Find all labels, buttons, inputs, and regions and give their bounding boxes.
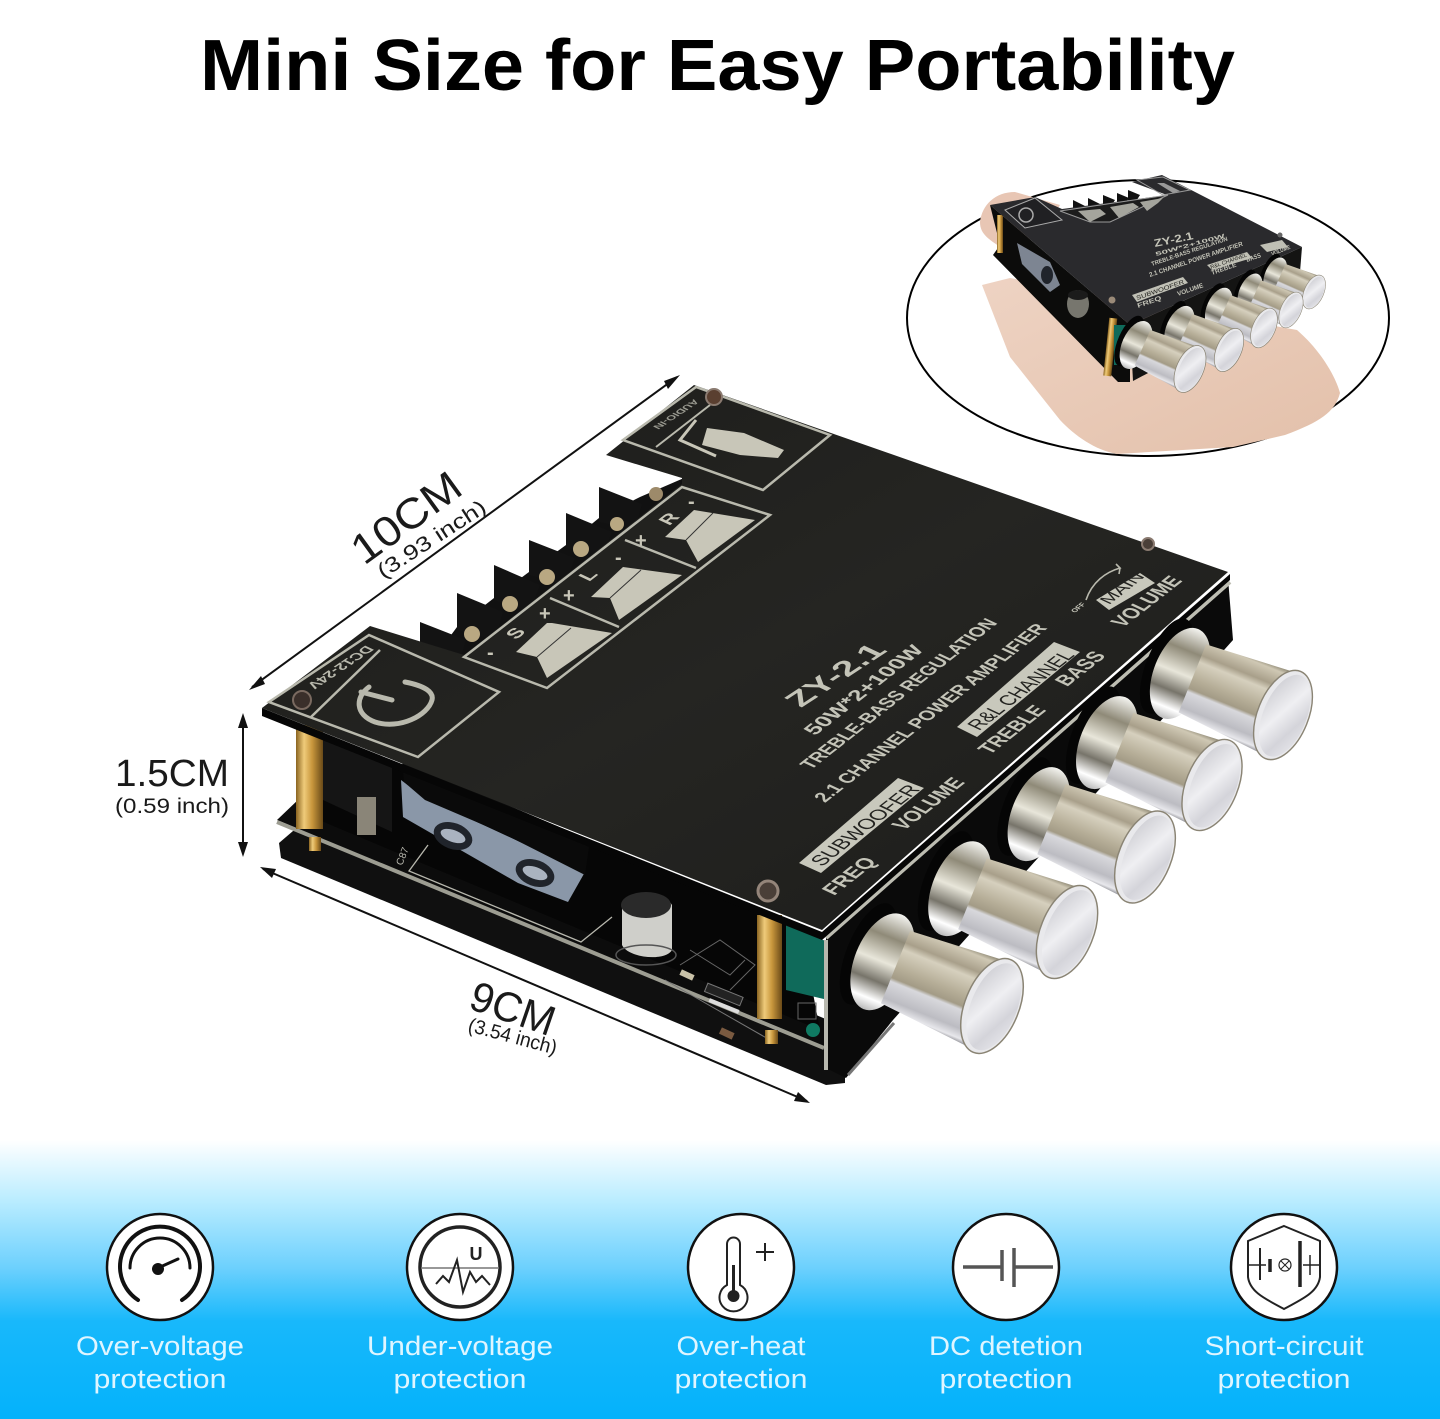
- product labels: ZY-2.1: [777, 639, 894, 711]
- icon: gauge: [120, 1227, 200, 1300]
- mini board body: [990, 175, 1302, 382]
- power box: [269, 635, 499, 757]
- main volume label group: OFF: [1069, 601, 1088, 614]
- subwoofer label group: VOLUME: [887, 774, 970, 833]
- terminal labels: S: [501, 625, 531, 642]
- mini board labels: 50W*2+100W: [1155, 233, 1227, 258]
- gold standoffs: [296, 725, 782, 1044]
- dimension: 9CM: 9CM: [464, 972, 562, 1045]
- bottom plate: [279, 825, 845, 1085]
- screw terminals: [420, 478, 690, 660]
- icon: voltage wave: [420, 1227, 500, 1307]
- green PCB edge: [786, 925, 828, 1000]
- feature: over-heat protection: [674, 1214, 808, 1394]
- mini board labels: SUBWOOFER: [1136, 279, 1186, 302]
- dimension: 1.5CM: [115, 713, 248, 857]
- small capacitor: [616, 892, 676, 965]
- mini board labels: [1132, 230, 1291, 310]
- main volume label group: MAIN: [1095, 570, 1149, 607]
- knobs: [828, 611, 1326, 1064]
- mini board labels: TREBLE-BASS REGULATION: [1151, 237, 1229, 268]
- feature: over-voltage protection: Over-voltage: [76, 1331, 244, 1361]
- inset ellipse frame: [907, 180, 1389, 456]
- mini board labels: 2.1 CHANNEL POWER AMPLIFIER: [1148, 241, 1244, 279]
- mini board labels: TREBLE: [1211, 261, 1238, 277]
- feature: under-voltage protection: Under-voltage: [367, 1331, 553, 1361]
- main volume label group: [1069, 564, 1187, 630]
- terminal labels: +: [563, 585, 575, 607]
- title: Mini Size for Easy Portability: [200, 26, 1235, 106]
- R&L channel label group: [957, 642, 1111, 757]
- icon: speakers: [516, 510, 755, 678]
- main volume label group: VOLUME: [1106, 573, 1187, 630]
- R&L channel label group: TREBLE: [973, 702, 1051, 757]
- product labels: TREBLE-BASS REGULATION: [796, 616, 1003, 772]
- power box: DC12-24V: [302, 643, 377, 690]
- hand: [982, 278, 1340, 454]
- top plate thickness: [262, 574, 1230, 940]
- R&L channel label group: BASS: [1050, 648, 1111, 689]
- terminal labels: +: [635, 530, 647, 552]
- product labels: 50W*2+100W: [798, 641, 930, 738]
- dimension: 10CM: (3.93 inch): [373, 496, 491, 583]
- subwoofer label group: SUBWOOFER: [805, 782, 925, 869]
- feature: over-heat protection: protection: [674, 1364, 808, 1394]
- terminal labels: +: [539, 603, 551, 625]
- mini board labels: R&L CHANNEL: [1210, 253, 1248, 271]
- product labels: 2.1 CHANNEL POWER AMPLIFIER: [810, 621, 1052, 805]
- mini board labels: VOLUME: [1177, 282, 1205, 298]
- mini board labels: BASS: [1246, 252, 1262, 264]
- terminal labels: -: [487, 642, 494, 664]
- icon: capacitor symbol: [963, 1248, 1053, 1287]
- feature: short-circuit protection: Short-circuit: [1204, 1331, 1364, 1361]
- blue feature band: [0, 1140, 1440, 1419]
- inner dark cavity: [300, 725, 820, 1030]
- R&L channel label group: R&L CHANNEL: [962, 647, 1080, 733]
- feature: DC detection protection: [929, 1214, 1083, 1394]
- terminal labels: -: [615, 547, 622, 569]
- feature: DC detection protection: DC detetion: [929, 1331, 1083, 1361]
- feature: over-voltage protection: protection: [94, 1364, 226, 1394]
- middle plate: [277, 798, 828, 1048]
- mini board labels: ZY-2.1: [1153, 230, 1195, 250]
- dimension: 1.5CM: (0.59 inch): [115, 795, 229, 818]
- PCB silkscreen trace: C87: [395, 846, 412, 867]
- feature: short-circuit protection: protection: [1218, 1364, 1350, 1394]
- front panel: [826, 578, 1233, 1078]
- feature: over-heat protection: Over-heat: [676, 1331, 806, 1361]
- mini board labels: FREQ: [1137, 295, 1162, 310]
- icon: voltage wave: U: [470, 1244, 482, 1264]
- feature: DC detection protection: protection: [940, 1364, 1072, 1394]
- feature: under-voltage protection: protection: [394, 1364, 526, 1394]
- product labels: [777, 616, 1052, 805]
- large capacitors: [401, 760, 590, 902]
- terminal labels: L: [574, 567, 603, 584]
- subwoofer label group: [799, 774, 970, 898]
- subwoofer label group: FREQ: [817, 854, 882, 898]
- terminal labels: -: [688, 491, 695, 513]
- icon: thermometer: [720, 1238, 774, 1311]
- feature: short-circuit protection: [1204, 1214, 1364, 1394]
- audio input box: AUDIO-IN: [650, 398, 701, 430]
- screws: [293, 389, 1154, 901]
- surface mount components: [665, 940, 820, 1040]
- feature: over-voltage protection: [76, 1214, 244, 1394]
- PCB silkscreen trace: [395, 845, 612, 942]
- amplifier board: [262, 385, 1326, 1085]
- mini board knobs: [1108, 251, 1331, 398]
- speaker terminals box: [464, 487, 770, 688]
- dimension: 10CM: 10CM: [342, 462, 470, 573]
- power jack: [323, 740, 392, 832]
- audio input box: [623, 387, 830, 490]
- inset: hand holding amplifier: [907, 175, 1389, 456]
- terminal labels: R: [654, 510, 685, 528]
- icon: audio jack: [702, 428, 784, 458]
- top plate: [262, 385, 1228, 930]
- dimension: 10CM: [249, 375, 680, 690]
- dimension: 9CM: [260, 867, 810, 1103]
- terminal labels: [487, 491, 695, 664]
- fingers behind board: [980, 192, 1060, 250]
- dimension: 1.5CM: 1.5CM: [115, 753, 229, 795]
- feature: under-voltage protection: [367, 1214, 553, 1394]
- dimension: 9CM: (3.54 inch): [466, 1015, 559, 1059]
- icon: power symbol: [359, 682, 432, 724]
- icon: shield circuit: [1248, 1226, 1320, 1309]
- mini board labels: VOLUME: [1271, 245, 1291, 258]
